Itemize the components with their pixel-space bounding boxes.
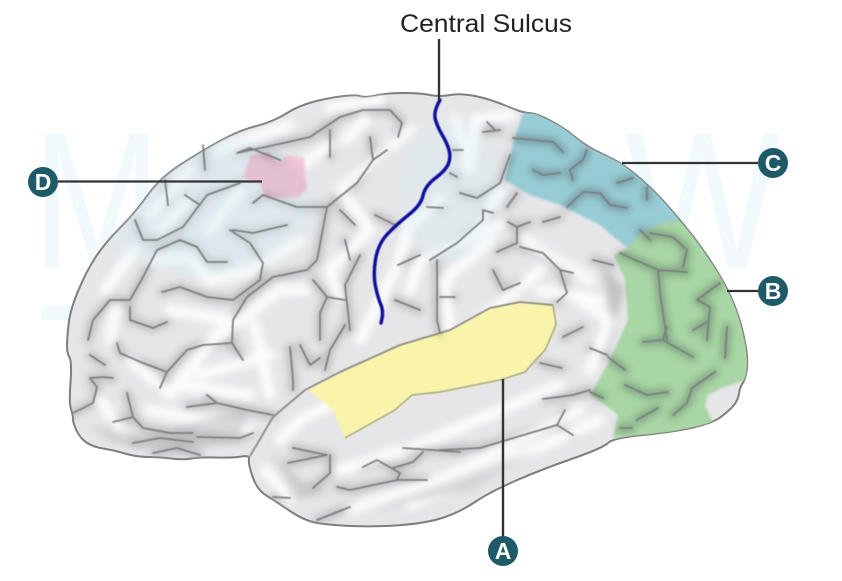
label C	[622, 148, 788, 178]
label B	[727, 276, 788, 306]
region B: green	[590, 220, 748, 438]
watermark: W	[625, 92, 780, 310]
label A: A	[495, 538, 511, 564]
central sulcus line	[374, 100, 450, 323]
region A: yellow	[308, 302, 556, 438]
label: Central Sulcus: Central Sulcus	[400, 10, 572, 38]
label B: B	[765, 278, 781, 304]
brain base	[67, 93, 747, 526]
region D: pink	[243, 152, 307, 198]
brain sulci	[73, 110, 727, 520]
watermark	[33, 92, 780, 320]
brain illustration	[67, 93, 748, 526]
region C: teal	[505, 113, 680, 248]
watermark: M	[33, 92, 161, 310]
yellow lower edge	[345, 305, 556, 438]
label D	[28, 167, 262, 197]
label D: D	[35, 169, 51, 195]
lateral fissure	[250, 302, 553, 456]
label A	[488, 379, 518, 566]
label C: C	[765, 150, 781, 176]
brain shading	[73, 100, 748, 520]
